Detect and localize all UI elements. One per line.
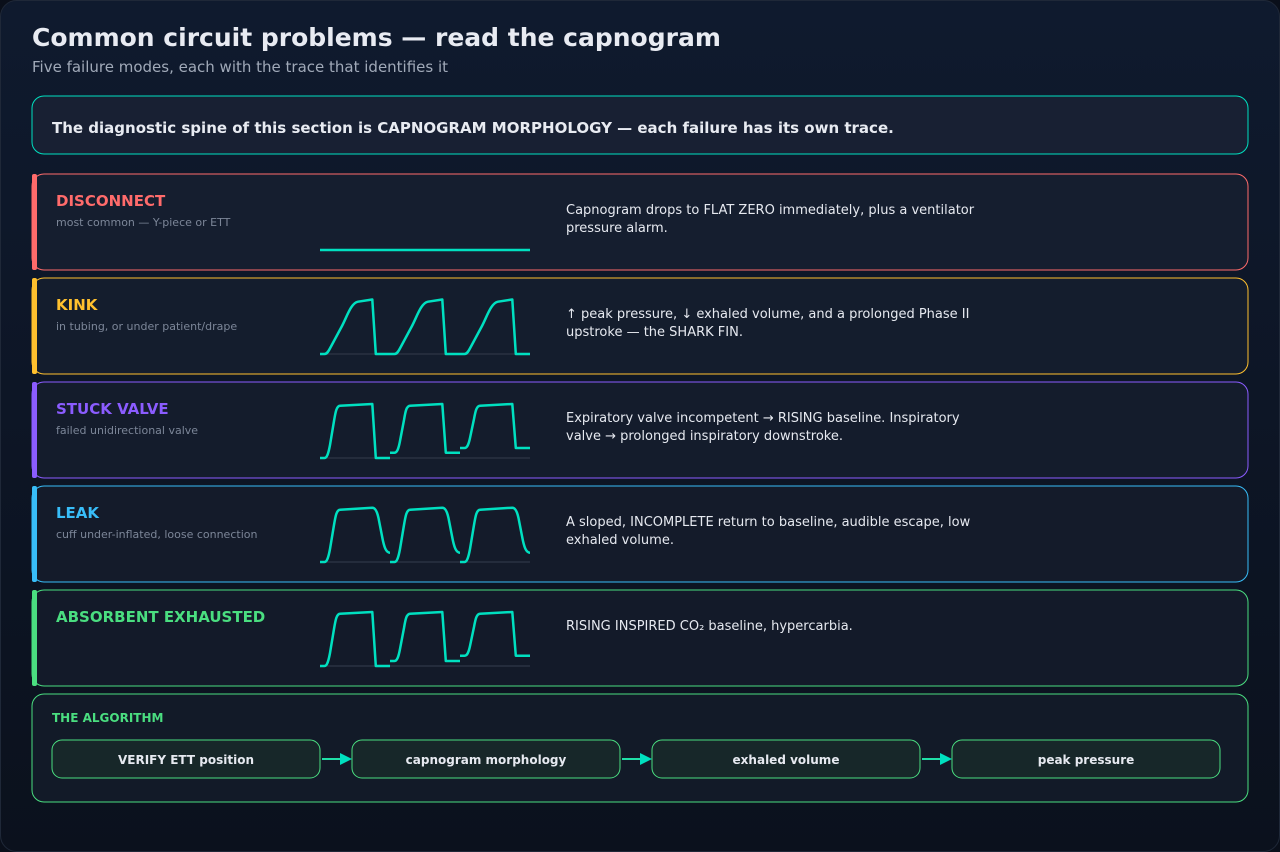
panel: disconnect (32, 174, 1248, 270)
step: peak pressure: peak pressure (1038, 753, 1134, 767)
panel: absorbent exhausted (32, 590, 1248, 686)
trace: shark fin (320, 300, 530, 354)
note: stuck valve: failed unidirectional valve (56, 424, 198, 437)
note: kink: in tubing, or under patient/drape (56, 320, 237, 333)
description: kink: ↑ peak pressure, ↓ exhaled volume, and a prolonged Phase II (566, 307, 969, 322)
step: exhaled volume: exhaled volume (733, 753, 839, 767)
step: peak pressure (952, 740, 1220, 778)
callout (32, 96, 1248, 154)
description: kink: upstroke — the SHARK FIN. (566, 325, 743, 340)
title: Common circuit problems — read the capnogram (32, 23, 721, 52)
description: stuck valve: Expiratory valve incompetent → RISING baseline. Inspiratory (566, 411, 960, 426)
accent bar: kink (32, 278, 37, 374)
description: disconnect: Capnogram drops to FLAT ZERO immediately, plus a ventilator (566, 203, 974, 218)
heading: the algorithm: THE ALGORITHM (52, 711, 163, 725)
callout: The diagnostic spine of this section is CAPNOGRAM MORPHOLOGY — each failure has its own trace. (52, 119, 894, 137)
panel: leak (32, 486, 1248, 582)
note: disconnect: most common — Y-piece or ETT (56, 216, 231, 229)
heading: disconnect: DISCONNECT (56, 192, 166, 210)
description: stuck valve: valve → prolonged inspiratory downstroke. (566, 429, 843, 444)
step: exhaled volume (652, 740, 920, 778)
arrow (922, 753, 952, 765)
panel: the algorithm (32, 694, 1248, 802)
heading: kink: KINK (56, 296, 99, 314)
arrow (622, 753, 652, 765)
accent bar: absorbent exhausted (32, 590, 37, 686)
description: leak: exhaled volume. (566, 533, 674, 548)
accent bar: leak (32, 486, 37, 582)
description: leak: A sloped, INCOMPLETE return to baseline, audible escape, low (566, 515, 970, 530)
step: verify ETT: VERIFY ETT position (118, 753, 254, 767)
panel: kink (32, 278, 1248, 374)
heading: absorbent exhausted: ABSORBENT EXHAUSTED (56, 608, 265, 626)
panel: stuck valve (32, 382, 1248, 478)
description: disconnect: pressure alarm. (566, 221, 668, 236)
trace: rising baseline (320, 404, 530, 458)
heading: stuck valve: STUCK VALVE (56, 400, 169, 418)
subtitle: Five failure modes, each with the trace that identifies it (32, 58, 448, 76)
step: capnogram morphology: capnogram morphology (406, 753, 567, 767)
trace: flat zero (320, 249, 530, 251)
accent bar: stuck valve (32, 382, 37, 478)
step: capnogram morphology (352, 740, 620, 778)
arrow (322, 753, 352, 765)
note: leak: cuff under-inflated, loose connection (56, 528, 257, 541)
accent bar: disconnect (32, 174, 37, 270)
trace: rising inspired baseline (320, 612, 530, 666)
description: absorbent exhausted: RISING INSPIRED CO₂ baseline, hypercarbia. (566, 619, 853, 634)
trace: incomplete return (320, 508, 530, 562)
heading: leak: LEAK (56, 504, 100, 522)
step: verify ETT (52, 740, 320, 778)
